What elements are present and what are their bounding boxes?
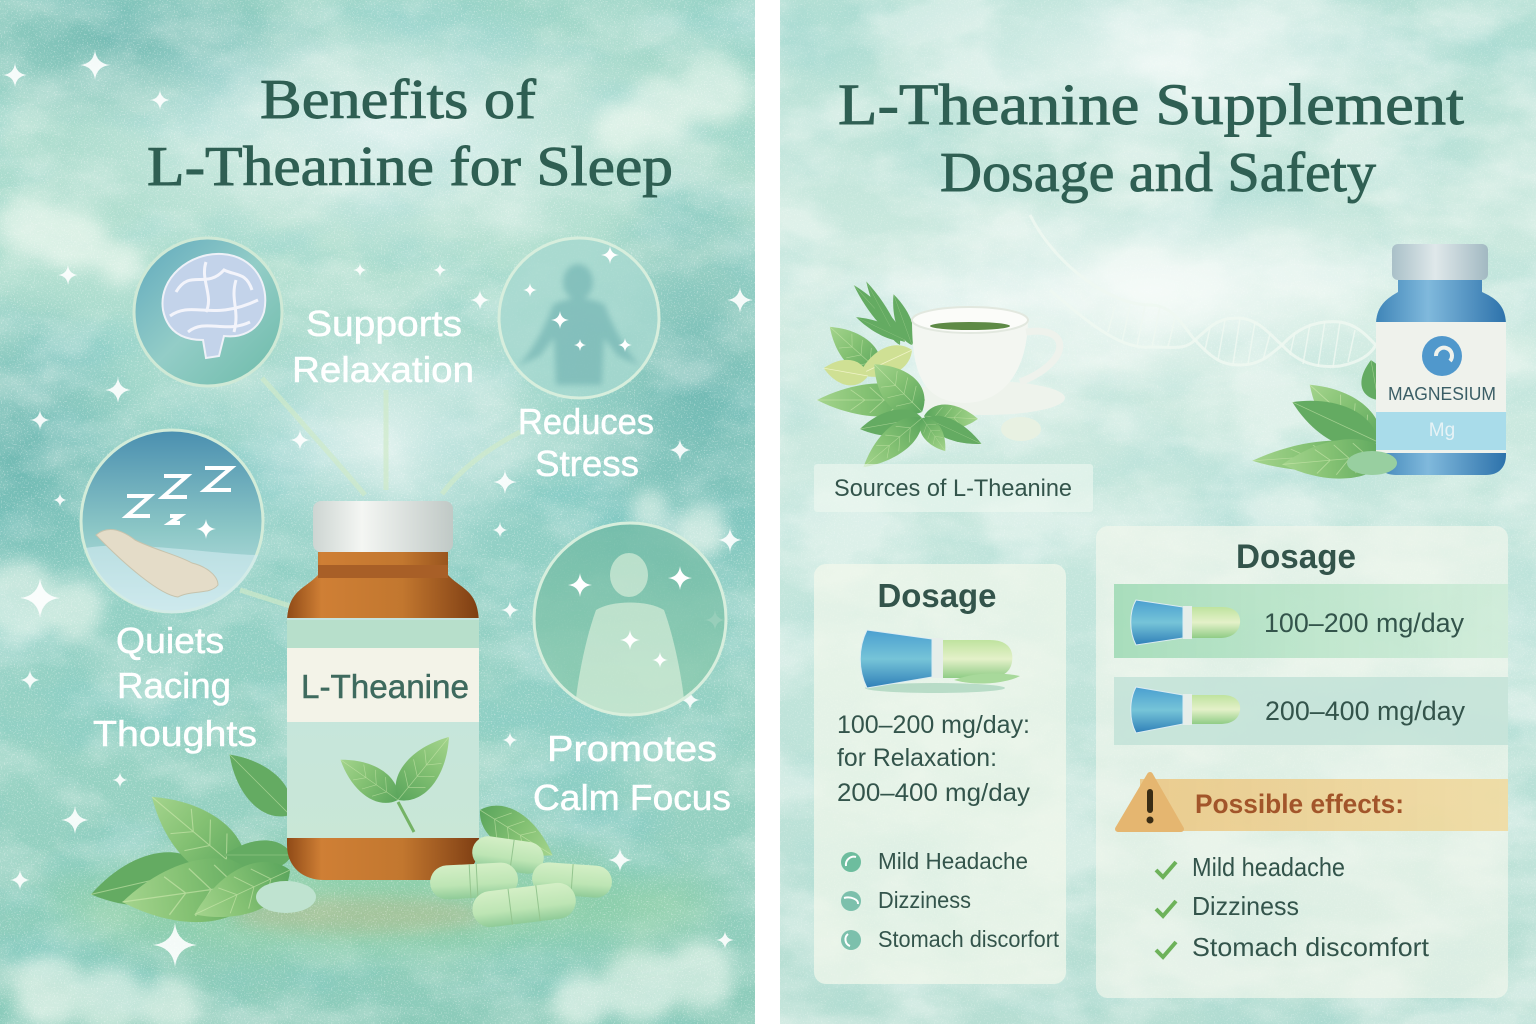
illustration: leaves behind bottle (85, 741, 562, 935)
icon: warning triangle (1118, 775, 1181, 829)
dose row 200-400: 200–400 mg/day (1265, 696, 1465, 726)
caption: sources of L-Theanine: Sources of L-Theanine (834, 475, 1072, 502)
heading: dosage: Dosage (878, 577, 996, 614)
side effect list: Mild Headache (878, 848, 1028, 874)
warning banner: Possible effects: (1195, 789, 1404, 819)
icon: capsule tube large (860, 630, 1020, 693)
panel: left dosage card (814, 564, 1066, 984)
label: supports relaxation (292, 303, 474, 390)
icon: meditating figure circle (499, 238, 659, 398)
label: quiets racing thoughts: Quiets (116, 620, 224, 661)
panel: dosage background (770, 0, 1536, 1024)
label: reduces stress (518, 401, 654, 484)
illustration: L-Theanine bottle (287, 501, 479, 880)
dose row 200-400 (1114, 677, 1508, 745)
possible effects list: Mild headache (1192, 852, 1345, 882)
illustration: tea cup with leaves (817, 279, 1065, 478)
heading: dosage: Dosage (1236, 538, 1356, 576)
label: supports relaxation: Supports (306, 303, 462, 344)
dosage text: for Relaxation: (837, 744, 997, 772)
heading: dosage and safety title (838, 72, 1464, 204)
side effect list: Dizziness (878, 887, 971, 913)
illustration: capsules and tablet (256, 834, 613, 929)
heading: benefits title (147, 69, 673, 198)
panel: right dosage card (1096, 526, 1508, 998)
caption: sources of L-Theanine (814, 464, 1093, 512)
possible effects list: Stomach discomfort (1192, 932, 1430, 962)
label: reduces stress: Reduces (518, 401, 654, 442)
icon: silhouette circle (534, 523, 726, 716)
label: promotes calm focus: Promotes (547, 728, 717, 769)
side effect list: Stomach discorfort (878, 926, 1060, 952)
label: promotes calm focus: Calm Focus (533, 777, 731, 818)
label: supports relaxation: Relaxation (292, 349, 474, 390)
bottle label text: L-Theanine (301, 668, 469, 705)
heading: benefits title: L-Theanine for Sleep (147, 136, 673, 198)
bottle label text: MAGNESIUM (1388, 384, 1496, 404)
illustration: magnesium bottle: Mg (1429, 420, 1455, 441)
side effect list (841, 848, 1060, 952)
icon: sleeping figure circle (81, 430, 263, 613)
illustration: magnesium bottle (1251, 244, 1506, 484)
possible effects list: Dizziness (1192, 891, 1299, 921)
label: quiets racing thoughts (93, 620, 257, 754)
label: quiets racing thoughts: Racing (117, 665, 231, 706)
possible effects list (1156, 852, 1430, 962)
label: promotes calm focus (533, 728, 731, 818)
label: reduces stress: Stress (535, 443, 639, 484)
icon: leaf on label (332, 726, 463, 832)
label: quiets racing thoughts: Thoughts (93, 713, 257, 754)
dosage text: 200–400 mg/day (837, 779, 1031, 807)
heading: dosage and safety title: Dosage and Safety (940, 142, 1376, 204)
dose row 100-200: 100–200 mg/day (1264, 608, 1464, 638)
panel: benefits background (0, 0, 755, 1024)
heading: dosage and safety title: L-Theanine Supplement (838, 72, 1464, 137)
connector lines to bottle (240, 378, 520, 606)
icon: DNA helix backdrop (1030, 215, 1376, 367)
icon: brain circle (134, 238, 282, 386)
dose row 100-200 (1114, 584, 1508, 658)
heading: benefits title: Benefits of (260, 69, 536, 131)
dosage text (837, 711, 1031, 807)
warning banner (1118, 775, 1508, 831)
dosage text: 100–200 mg/day: (837, 711, 1030, 739)
